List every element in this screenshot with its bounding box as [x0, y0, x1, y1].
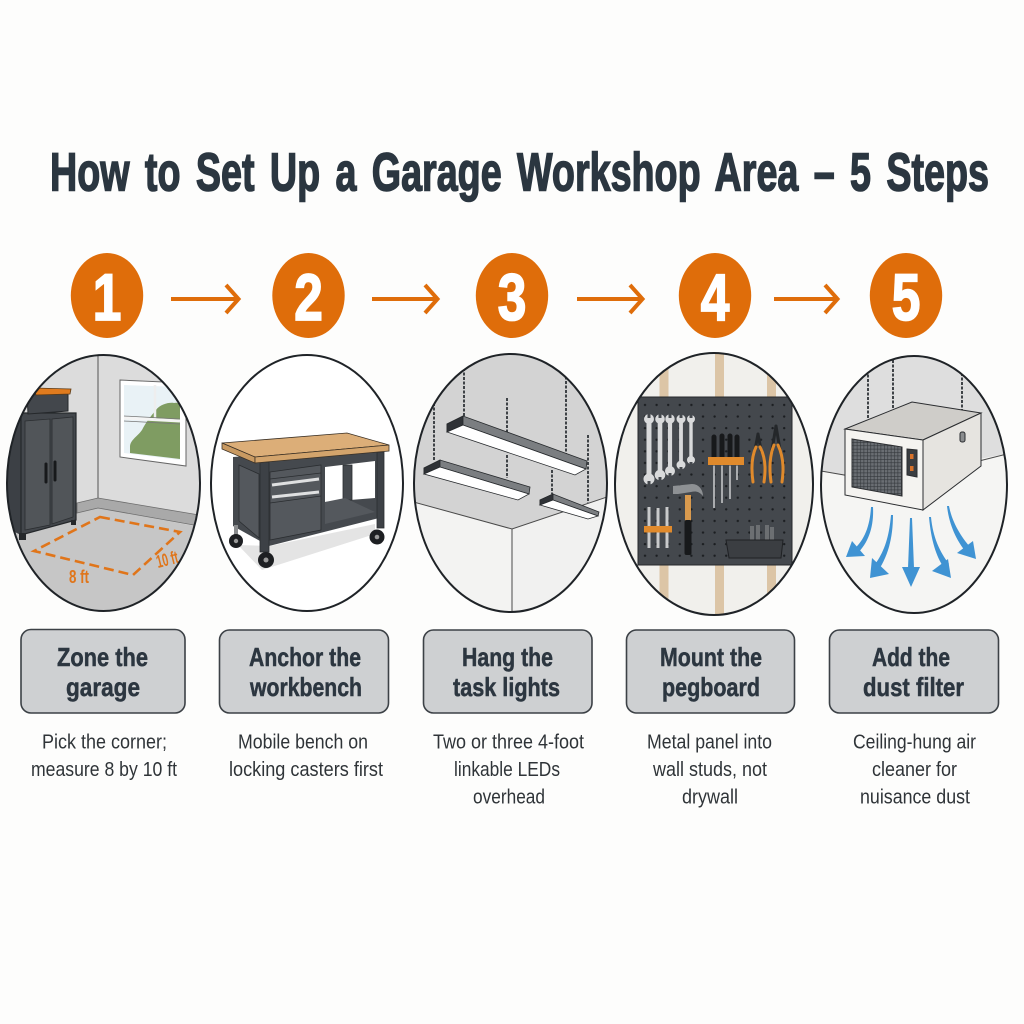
step number 4 [679, 253, 751, 338]
step number 2: 2 [294, 260, 323, 334]
parts bin [726, 525, 783, 558]
step number 1: 1 [93, 260, 121, 334]
description: step 5: nuisance dust [860, 786, 970, 808]
description: step 1: Pick the corner; [42, 730, 167, 754]
label: step 2 [220, 630, 388, 713]
small drivers in holder [644, 507, 672, 548]
description: step 5 [853, 730, 976, 808]
bench frame [233, 447, 384, 552]
description: step 1: measure 8 by 10 ft [31, 758, 177, 781]
panel: workbench illustration [211, 355, 403, 611]
label: step 5 [830, 630, 998, 713]
label: step 4 [626, 630, 794, 713]
label: step 3: Hang the [462, 642, 553, 672]
step number 5 [870, 253, 942, 338]
step number 3: 3 [498, 260, 526, 334]
storage bin [27, 388, 71, 414]
pegboard panel [638, 397, 792, 565]
step number 3 [476, 253, 548, 338]
label: step 1: Zone the [57, 642, 148, 672]
description: step 2: locking casters first [229, 758, 383, 781]
description: step 5: Ceiling-hung air [853, 730, 976, 754]
step number 4: 4 [701, 260, 729, 334]
label: step 3 [424, 630, 592, 713]
hanging chains [867, 360, 963, 418]
label: step 2: Anchor the [249, 642, 361, 672]
arrow 2 to 3 [372, 285, 438, 313]
description: step 3: overhead [473, 786, 545, 808]
step number 2 [272, 253, 345, 338]
label: step 2: workbench [249, 672, 362, 702]
label: step 3: task lights [453, 672, 560, 702]
butcher block top [222, 433, 389, 463]
arrow 1 to 2 [171, 285, 238, 313]
wrenches [644, 413, 694, 486]
description: step 2: Mobile bench on [238, 730, 368, 754]
description: step 2 [229, 730, 383, 781]
label: step 4: pegboard [662, 672, 760, 702]
light fixture 3 [540, 494, 599, 519]
hanging chains [434, 368, 588, 503]
label: step 1 [21, 630, 185, 713]
description: step 4: Metal panel into [647, 730, 772, 754]
description: step 1 [31, 730, 177, 781]
panel: task lights illustration [410, 350, 610, 615]
description: step 4 [647, 730, 772, 808]
label: step 5: Add the [872, 642, 950, 672]
window [120, 380, 186, 466]
description: step 5: cleaner for [872, 758, 957, 781]
dimension 8 ft: 8 ft [69, 567, 89, 587]
casters [229, 530, 384, 568]
hammer [673, 484, 703, 555]
airflow arrows [846, 506, 976, 587]
light fixture 1 [447, 416, 587, 475]
dimension 10 ft: 10 ft [154, 547, 180, 572]
bench shadow [238, 524, 375, 570]
description: step 3 [433, 730, 584, 808]
screwdrivers [708, 436, 744, 508]
floor zone dashed outline [34, 517, 180, 575]
arrow 4 to 5 [774, 285, 838, 313]
description: step 4: wall studs, not [652, 758, 767, 781]
label: step 5: dust filter [863, 672, 964, 702]
arrow 3 to 4 [577, 285, 642, 313]
description: step 3: Two or three 4-foot [433, 730, 584, 754]
panel: pegboard illustration [610, 350, 815, 620]
step number 5: 5 [892, 260, 920, 334]
panel: dust filter illustration [815, 350, 1010, 620]
description: step 3: linkable LEDs [454, 758, 560, 781]
panel: zone the garage illustration [0, 350, 205, 620]
storage cabinet [0, 413, 76, 540]
pliers [752, 426, 783, 482]
light fixture 2 [424, 460, 530, 500]
air cleaner unit [845, 402, 981, 510]
step number 1 [71, 253, 143, 338]
description: step 4: drywall [682, 786, 738, 808]
label: step 1: garage [66, 672, 140, 702]
infographic [6, 150, 1008, 808]
label: step 4: Mount the [660, 642, 762, 672]
